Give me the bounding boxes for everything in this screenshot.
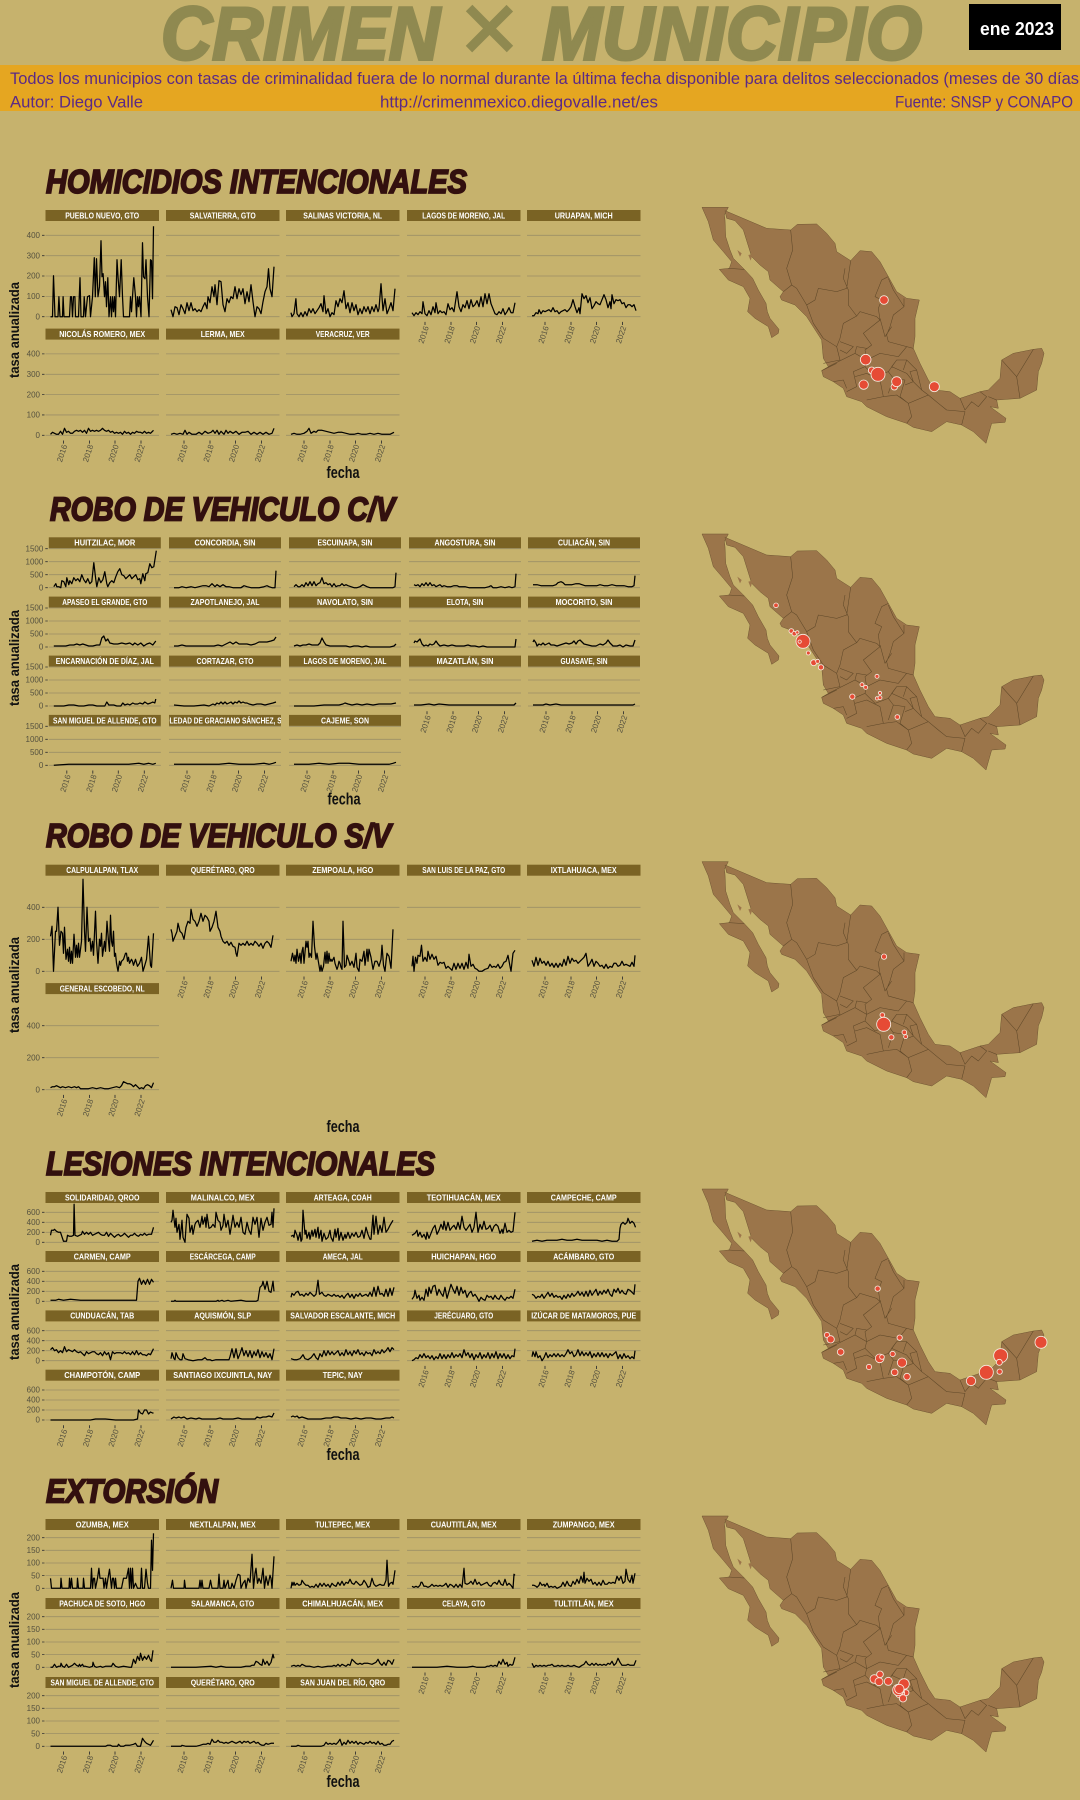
facet: Nicolás Romero: NICOLÁS ROMERO, MEX — [59, 329, 145, 339]
y axis title: tasa anualizada — [6, 937, 22, 1033]
facet: General Escobedo — [46, 983, 159, 1118]
facet: Salvatierra — [166, 210, 280, 317]
facet: San Miguel de Allende: SAN MIGUEL DE ALLENDE, GTO — [53, 715, 157, 725]
facet: Aquismón: AQUISMÓN, SLP — [194, 1310, 251, 1321]
panel: robo de vehiculo s/v — [6, 817, 1044, 1136]
facet: Aquismón — [166, 1310, 280, 1361]
facet: Mocorito — [528, 597, 640, 647]
y axis row 2 — [26, 604, 48, 652]
facet: Solidaridad — [46, 1192, 159, 1242]
facet: Apaseo el Grande — [49, 597, 161, 647]
facet: Salvatierra: SALVATIERRA, GTO — [190, 210, 256, 220]
facet: Concordia — [169, 537, 281, 588]
facet: Champotón: CHAMPOTÓN, CAMP — [64, 1369, 140, 1380]
subtitle band: http://crimenmexico.diegovalle.net/es — [380, 92, 658, 112]
facet: San Luis de la Paz — [407, 865, 520, 999]
facet: Encarnación de Díaz: ENCARNACIÓN DE DÍAZ, JAL — [56, 655, 154, 666]
facet: Lagos de Moreno — [289, 656, 401, 706]
facet: Ixtlahuaca: IXTLAHUACA, MEX — [551, 865, 617, 875]
map dots: homicidios — [859, 296, 939, 392]
heading: lesiones: LESIONES INTENCIONALES — [46, 1145, 435, 1182]
facet: Nextlalpan — [166, 1519, 280, 1588]
facet: Cortazar — [169, 656, 281, 706]
facet: Izúcar de Matamoros: IZÚCAR DE MATAMOROS, PUE — [531, 1310, 636, 1321]
facet: Querétaro: QUERÉTARO, QRO — [191, 1677, 255, 1687]
facet: Salinas Victoria: SALINAS VICTORIA, NL — [303, 210, 382, 220]
facet: Calpulalpan: CALPULALPAN, TLAX — [66, 865, 138, 875]
facet: Veracruz — [286, 329, 400, 463]
y axis row 1 — [27, 903, 44, 976]
y axis row 1 — [27, 231, 44, 321]
y axis title: tasa anualizada — [6, 1264, 22, 1360]
facet: Cuautitlán: CUAUTITLÁN, MEX — [431, 1519, 497, 1529]
heading: robo c/v: ROBO DE VEHICULO C/V — [50, 490, 398, 528]
y axis row 1 — [26, 544, 48, 592]
facet: Zempoala: ZEMPOALA, HGO — [312, 865, 374, 875]
facet: Malinalco — [166, 1192, 280, 1242]
facet: Cortazar: CORTAZAR, GTO — [196, 656, 254, 666]
facet: Calpulalpan — [46, 865, 159, 971]
facet: Salvador Escalante — [286, 1310, 400, 1361]
facet: Cajeme: CAJEME, SON — [321, 715, 369, 725]
facet: Culiacán — [528, 537, 640, 588]
facet: Nicolás Romero — [46, 329, 159, 463]
facet: Cunduacán: CUNDUACÁN, TAB — [70, 1311, 134, 1321]
x axis title: fecha — [328, 790, 361, 808]
panel: lesiones intencionales — [6, 1145, 1047, 1464]
facet: Escuinapa: ESCUINAPA, SIN — [318, 538, 372, 548]
subtitle band: Todos los municipios con tasas de criminalidad fuera de lo normal durante la última fecha disponible para delitos seleccionados (meses de 30 días — [10, 69, 1079, 88]
facet: Celaya — [407, 1598, 520, 1695]
facet: Ozumba — [46, 1519, 159, 1588]
facet: Lagos de Moreno — [407, 210, 520, 345]
facet: Pueblo Nuevo — [46, 210, 159, 317]
facet: Tultitlán: TULTITLÁN, MEX — [554, 1598, 614, 1608]
facet: Malinalco: MALINALCO, MEX — [191, 1192, 255, 1202]
facet: Carmen: CARMEN, CAMP — [74, 1251, 131, 1261]
facet: Angostura — [409, 537, 521, 588]
y axis row 4 — [27, 1386, 44, 1425]
map: robo c/v — [702, 534, 1044, 770]
facet: Tepic — [286, 1370, 400, 1448]
heading: extorsión: EXTORSIÓN — [46, 1473, 219, 1510]
facet: Zempoala — [286, 865, 400, 999]
facet: Chimalhuacán — [286, 1598, 400, 1667]
facet: Huichapan: HUICHAPAN, HGO — [431, 1251, 497, 1261]
facet: Salamanca — [166, 1598, 280, 1667]
facet: Tultepec — [286, 1519, 400, 1588]
facet: Querétaro — [166, 1677, 280, 1774]
facet: Mazatlán: MAZATLÁN, SIN — [436, 656, 494, 666]
facet: San Miguel de Allende — [49, 715, 161, 793]
facet: Guasave: GUASAVE, SIN — [560, 656, 608, 666]
facet: Cajeme — [289, 715, 401, 793]
facet: Cuautitlán — [407, 1519, 520, 1588]
facet: Encarnación de Díaz — [49, 655, 161, 706]
map dots: robo s/v — [877, 954, 908, 1040]
facet: Salinas Victoria — [286, 210, 400, 317]
facet: San Miguel de Allende: SAN MIGUEL DE ALLENDE, GTO — [50, 1677, 154, 1687]
facet: Champotón — [46, 1369, 159, 1448]
facet: Santiago Ixcuintla: SANTIAGO IXCUINTLA, NAY — [173, 1370, 272, 1380]
facet: Mazatlán — [409, 656, 521, 734]
heading: robo s/v: ROBO DE VEHICULO S/V — [46, 817, 394, 854]
facet: Pachuca de Soto: PACHUCA DE SOTO, HGO — [59, 1598, 146, 1608]
facet: Ixtlahuaca — [527, 865, 640, 999]
y axis row 2 — [27, 1612, 44, 1672]
facet: Uruapan: URUAPAN, MICH — [555, 210, 613, 220]
facet: Solidaridad: SOLIDARIDAD, QROO — [65, 1192, 140, 1202]
facet: Lagos de Moreno: LAGOS DE MORENO, JAL — [304, 656, 386, 666]
facet: Concordia: CONCORDIA, SIN — [194, 538, 256, 548]
facet: Navolato: NAVOLATO, SIN — [317, 597, 373, 607]
facet: Navolato — [289, 597, 401, 647]
facet: Campeche — [527, 1192, 640, 1242]
facet: Pachuca de Soto — [46, 1598, 159, 1667]
map: lesiones — [702, 1189, 1047, 1425]
panel: extorsión — [6, 1473, 1044, 1791]
facet: Teotihuacán: TEOTIHUACÁN, MEX — [427, 1192, 501, 1202]
y axis row 3 — [27, 1326, 44, 1365]
facet: Uruapan — [527, 210, 640, 345]
facet: Arteaga: ARTEAGA, COAH — [314, 1192, 372, 1202]
map dots: robo c/v — [774, 603, 900, 719]
y axis row 2 — [27, 1267, 44, 1306]
facet: Tepic: TEPIC, NAY — [323, 1370, 363, 1380]
subtitle band: Autor: Diego Valle — [10, 92, 143, 112]
facet: San Juan del Río: SAN JUAN DEL RÍO, QRO — [300, 1677, 386, 1687]
facet: Lerma — [166, 329, 280, 463]
facet: Escárcega: ESCÁRCEGA, CAMP — [190, 1251, 256, 1261]
facet: Apaseo el Grande: APASEO EL GRANDE, GTO — [62, 597, 148, 607]
map: homicidios — [702, 207, 1044, 443]
facet: San Miguel de Allende — [46, 1677, 159, 1774]
facet: Cunduacán — [46, 1310, 159, 1361]
facet: Veracruz: VERACRUZ, VER — [316, 329, 370, 339]
date badge — [969, 4, 1061, 50]
facet: Ameca: AMECA, JAL — [323, 1251, 363, 1261]
heading: homicidios: HOMICIDIOS INTENCIONALES — [46, 163, 467, 200]
facet: Soledad de Graciano Sánchez: SOLEDAD DE GRACIANO SÁNCHEZ, SLP — [160, 715, 290, 725]
facet: Acámbaro: ACÁMBARO, GTO — [553, 1251, 615, 1261]
panel: homicidios intencionales — [6, 163, 1044, 482]
facet: Mocorito: MOCORITO, SIN — [556, 597, 612, 607]
facet: Culiacán: CULIACÁN, SIN — [558, 538, 610, 548]
map: robo s/v — [702, 862, 1044, 1098]
facet: Huitzilac: HUITZILAC, MOR — [74, 538, 135, 548]
facet: Guasave — [528, 656, 640, 734]
facet: Escuinapa — [289, 537, 401, 588]
x axis title: fecha — [326, 1117, 360, 1136]
facet: Acámbaro — [527, 1251, 640, 1301]
panel: robo de vehiculo c/v — [6, 490, 1044, 808]
facet: Zumpango — [527, 1519, 640, 1588]
facet: Salvador Escalante: SALVADOR ESCALANTE, MICH — [290, 1311, 395, 1321]
x axis title: fecha — [326, 1445, 360, 1464]
facet: San Luis de la Paz: SAN LUIS DE LA PAZ, GTO — [422, 865, 505, 875]
facet: Soledad de Graciano Sánchez — [169, 714, 281, 792]
facet: Nextlalpan: NEXTLALPAN, MEX — [190, 1519, 256, 1529]
facet: Ozumba: OZUMBA, MEX — [76, 1519, 129, 1529]
facet: Tultitlán — [527, 1598, 640, 1695]
facet: Santiago Ixcuintla — [166, 1370, 280, 1448]
y axis row 1 — [27, 1533, 44, 1593]
facet: Huitzilac — [49, 537, 161, 588]
facet: Huichapan — [407, 1251, 520, 1301]
facet: Zapotlanejo: ZAPOTLANEJO, JAL — [190, 597, 260, 607]
y axis title: tasa anualizada — [6, 282, 22, 378]
facet: Elota — [409, 597, 521, 647]
facet: Carmen — [46, 1251, 159, 1301]
facet: Salamanca: SALAMANCA, GTO — [191, 1598, 255, 1608]
facet: Campeche: CAMPECHE, CAMP — [551, 1192, 617, 1202]
y axis title: tasa anualizada — [6, 610, 22, 706]
facet: Arteaga — [286, 1192, 400, 1242]
facet: Elota: ELOTA, SIN — [446, 597, 484, 607]
facet: Querétaro: QUERÉTARO, QRO — [191, 865, 255, 875]
facet: Celaya: CELAYA, GTO — [442, 1598, 485, 1608]
facet: San Juan del Río — [286, 1677, 400, 1774]
title — [161, 0, 922, 84]
facet: Escárcega — [166, 1251, 280, 1301]
map dots: extorsión — [870, 1671, 909, 1702]
facet: Zumpango: ZUMPANGO, MEX — [553, 1519, 615, 1529]
facet: General Escobedo: GENERAL ESCOBEDO, NL — [60, 983, 145, 993]
facet: Jerécuaro — [407, 1310, 520, 1389]
map dots: lesiones — [824, 1286, 1047, 1386]
facet: Tultepec: TULTEPEC, MEX — [315, 1519, 370, 1529]
y axis row 1 — [27, 1208, 44, 1247]
facet: Teotihuacán — [407, 1192, 520, 1242]
y axis title: tasa anualizada — [6, 1592, 22, 1688]
y axis row 3 — [27, 1691, 44, 1751]
map: extorsión — [702, 1516, 1044, 1752]
facet: Lerma: LERMA, MEX — [201, 329, 245, 339]
y axis row 4 — [26, 722, 48, 770]
y axis row 2 — [27, 1021, 44, 1094]
facet: Zapotlanejo — [169, 597, 281, 647]
facet: Lagos de Moreno: LAGOS DE MORENO, JAL — [422, 210, 505, 220]
facet: Jerécuaro: JERÉCUARO, GTO — [434, 1311, 493, 1321]
facet: Angostura: ANGOSTURA, SIN — [434, 538, 496, 548]
facet: Ameca — [286, 1251, 400, 1301]
facet: Chimalhuacán: CHIMALHUACÁN, MEX — [302, 1598, 383, 1608]
x axis title: fecha — [326, 463, 360, 482]
facet: Pueblo Nuevo: PUEBLO NUEVO, GTO — [65, 210, 140, 220]
facet: Izúcar de Matamoros — [527, 1310, 640, 1389]
y axis row 3 — [26, 663, 48, 711]
date badge: ene 2023 — [980, 19, 1054, 39]
y axis row 2 — [27, 350, 44, 440]
subtitle band — [0, 65, 1080, 112]
facet: Querétaro — [166, 865, 280, 999]
x axis title: fecha — [326, 1772, 360, 1791]
